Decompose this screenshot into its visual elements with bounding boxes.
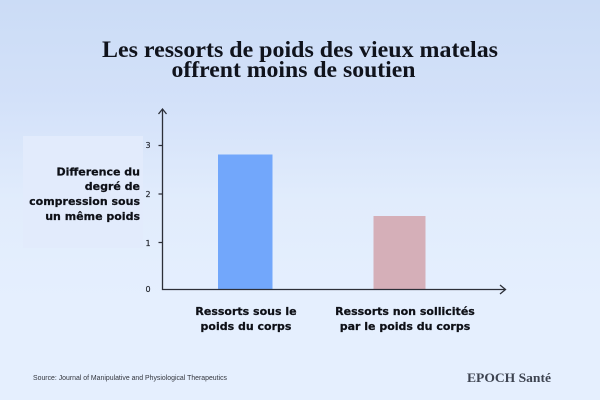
panel: y-axis label: degré de: [85, 180, 140, 193]
category label: springs not under body weight: par le poids du corps: [340, 320, 471, 333]
y-axis tick labels: 3: [145, 141, 151, 150]
title: Les ressorts de poids des vieux matelas: [102, 37, 498, 62]
panel: y-axis label: Difference du: [56, 166, 140, 178]
y-axis tick labels: 1: [145, 239, 151, 248]
category label: springs not under body weight: Ressorts non sollicités: [335, 305, 475, 318]
bar: springs under body weight: [218, 154, 272, 290]
y-axis tick labels: 2: [145, 190, 151, 199]
panel: y-axis label: un même poids: [45, 210, 140, 223]
panel: y-axis label: [23, 136, 143, 248]
category label: springs under body weight: [195, 305, 297, 333]
source: Source: Journal of Manipulative and Physiological Therapeutics: [33, 375, 227, 382]
category label: springs under body weight: Ressorts sous le: [195, 305, 297, 318]
category label: springs under body weight: poids du corps: [201, 320, 292, 333]
title: [102, 37, 498, 82]
y-axis tick labels: 0: [145, 285, 151, 294]
y-axis tick labels: [145, 141, 151, 294]
panel: y-axis label: compression sous: [29, 195, 140, 208]
title: offrent moins de soutien: [172, 57, 416, 82]
category label: springs not under body weight: [335, 305, 475, 333]
axes: [158, 109, 506, 294]
bar chart: [145, 109, 506, 333]
bar: springs not under body weight: [374, 216, 426, 290]
brand logo: EPOCH Santé: [467, 371, 551, 385]
